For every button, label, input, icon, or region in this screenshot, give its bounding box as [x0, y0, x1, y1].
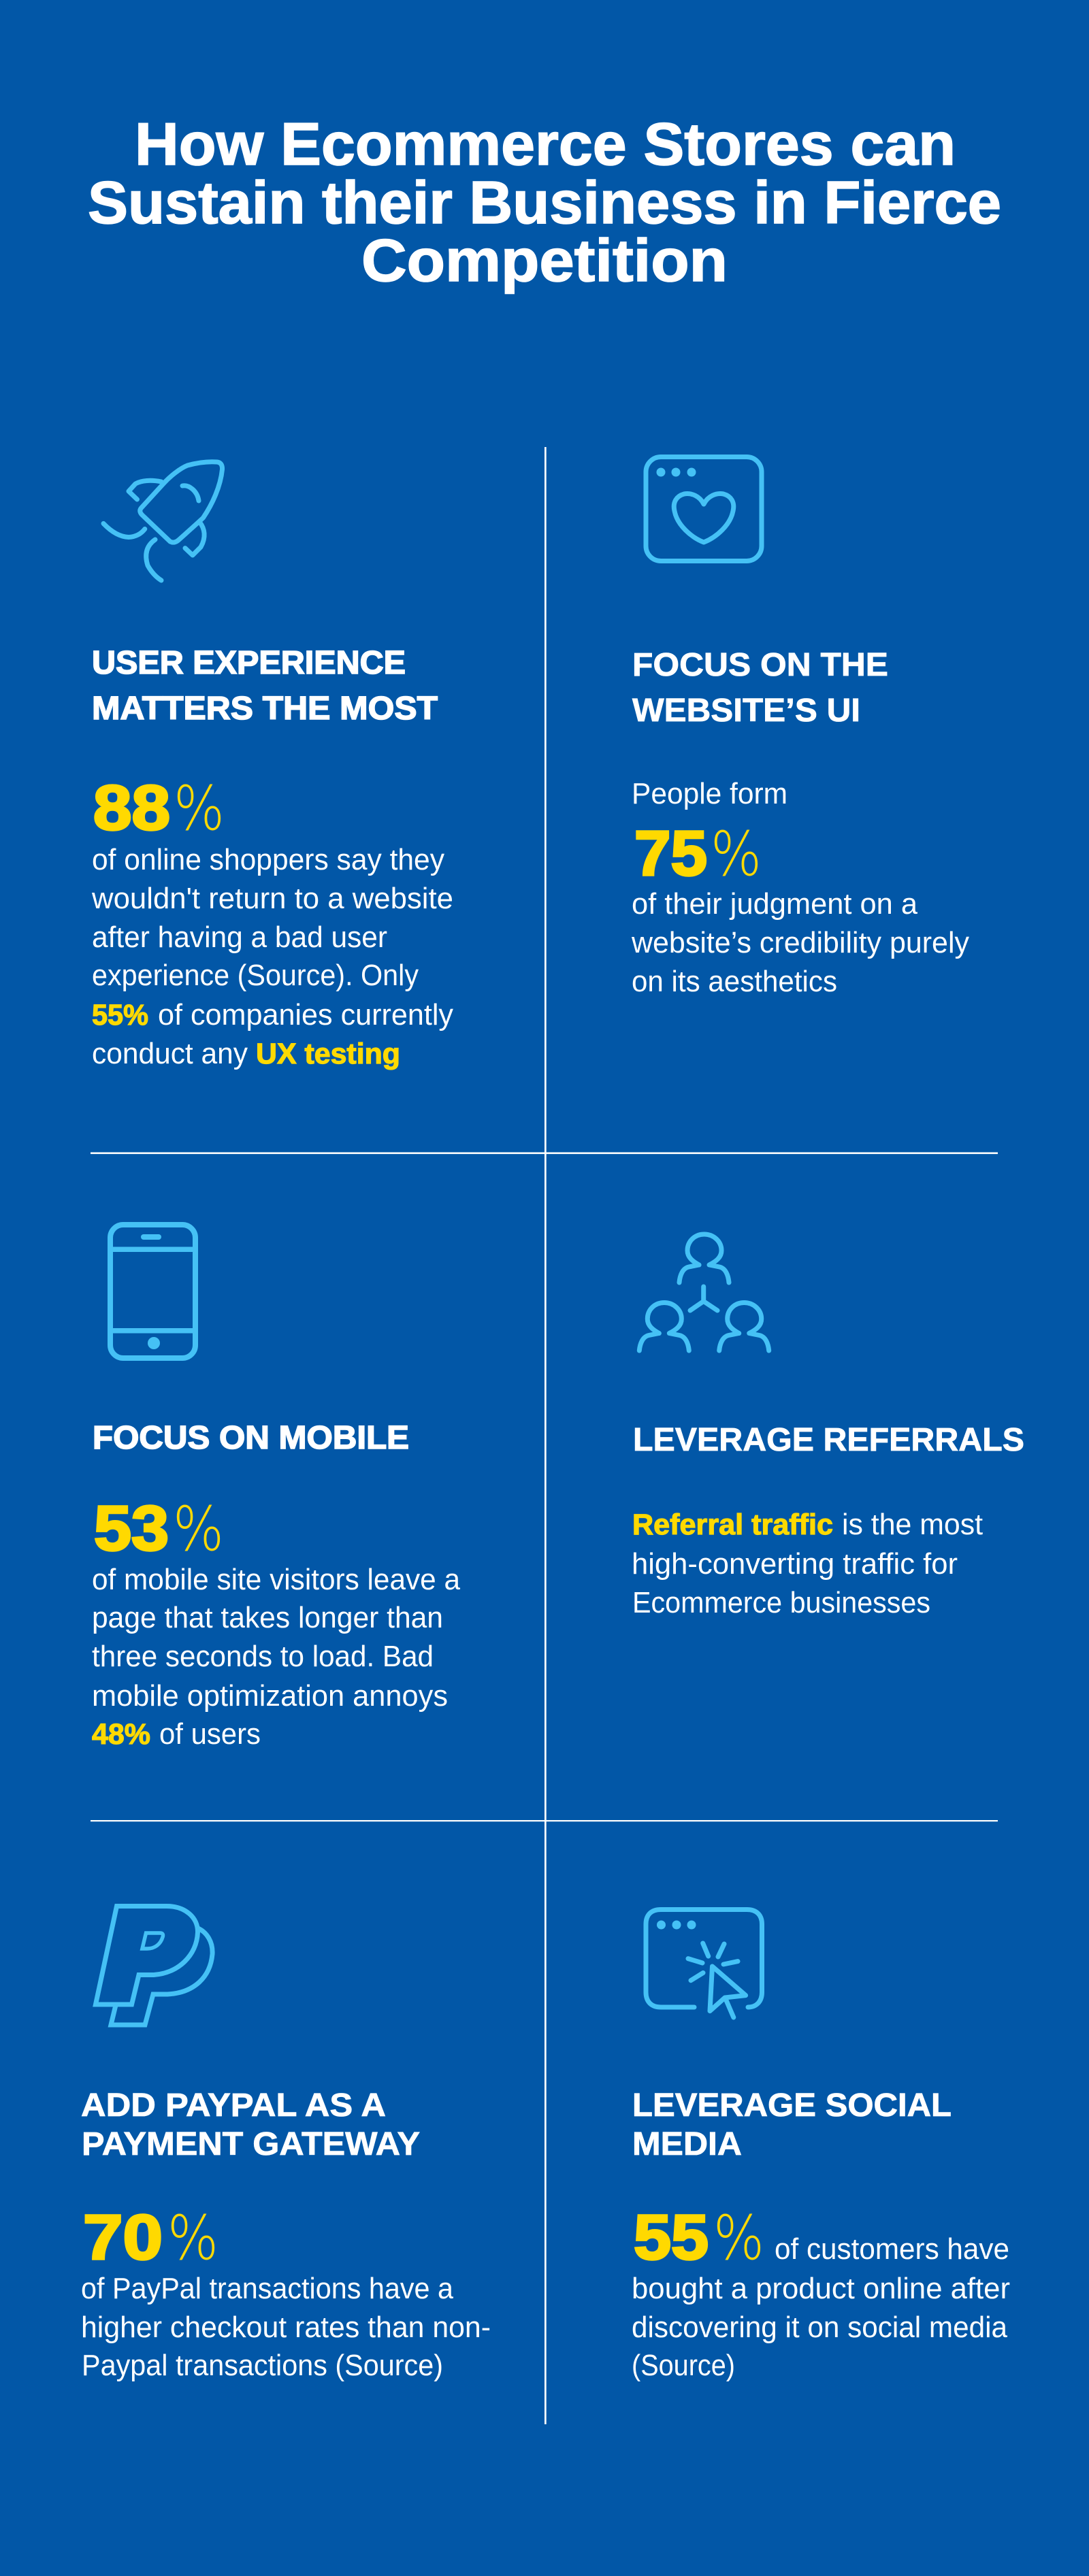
text block: user experience description: after having a bad user: [92, 921, 387, 954]
stat: 53%: 53: [94, 1493, 169, 1564]
icon: smartphone: [108, 1225, 197, 1358]
stat: 88%: %: [174, 773, 225, 844]
stat: 53%: %: [173, 1493, 224, 1565]
heading: leverage referrals: LEVERAGE REFERRALS: [633, 1422, 1024, 1458]
heading: user experience matters the most: MATTERS THE MOST: [92, 691, 438, 727]
title: Sustain their Business in Fierce: [88, 169, 1001, 236]
stat: 75%: %: [711, 819, 762, 890]
heading: add paypal as a payment gateway: [81, 2087, 420, 2162]
heading: leverage social media: MEDIA: [632, 2126, 742, 2162]
icon: referral people network: [639, 1234, 769, 1351]
text block: user experience description: [91, 843, 453, 1070]
heading: focus on mobile: FOCUS ON MOBILE: [93, 1420, 409, 1456]
panel: user experience: [91, 462, 453, 1070]
text block: referrals description: [632, 1508, 983, 1619]
icon: rocket: [103, 462, 223, 580]
stat: 88%: 88: [93, 772, 170, 843]
text block: mobile description: page that takes longer than: [92, 1601, 443, 1634]
text block: referrals description: Referral traffic: [632, 1508, 833, 1541]
text block: user experience description: experience (Source). Only: [92, 959, 419, 992]
icon: paypal logo: [95, 1906, 212, 2025]
text block: referrals description: is the most: [842, 1508, 983, 1541]
text block: mobile description: of mobile site visitors leave a: [92, 1563, 461, 1596]
text block: user experience description: wouldn't return to a website: [91, 882, 453, 915]
icon: browser window with heart: [646, 457, 762, 561]
text block: user experience description: of online shoppers say they: [92, 843, 444, 876]
text block: mobile description: three seconds to load. Bad: [92, 1640, 434, 1673]
text block: paypal description: Paypal transactions (Source): [82, 2349, 443, 2382]
heading: focus on the website's UI: FOCUS ON THE: [632, 647, 888, 683]
heading: focus on the website's UI: [632, 647, 888, 729]
stat: 70%: 70: [83, 2202, 163, 2273]
text block: social media description: (Source): [632, 2349, 735, 2382]
stat: 88%: [93, 772, 225, 844]
text block: paypal description: [81, 2272, 491, 2382]
heading: user experience matters the most: [92, 645, 438, 727]
title: Competition: [361, 227, 728, 294]
text block: referrals description: high-converting traffic for: [632, 1547, 958, 1581]
heading: focus on the website's UI: WEBSITE’S UI: [632, 693, 860, 729]
text block: paypal description: of PayPal transactions have a: [81, 2272, 453, 2305]
text block: user experience description: of companies currently: [158, 998, 453, 1031]
text block: social media description: of customers have: [775, 2232, 1009, 2266]
heading: user experience matters the most: USER EXPERIENCE: [92, 645, 406, 681]
stat: 70%: [83, 2202, 218, 2274]
stat: 55%: [634, 2202, 764, 2274]
text block: website UI description: [631, 887, 969, 998]
text block: user experience description: conduct any: [92, 1037, 248, 1070]
heading: leverage social media: LEVERAGE SOCIAL: [632, 2087, 952, 2124]
stat: 75%: 75: [634, 818, 707, 889]
panel: mobile: [92, 1225, 461, 1751]
text block: mobile description: 48%: [92, 1718, 150, 1751]
icon: browser window with cursor click: [646, 1909, 762, 2017]
panel: referrals: [632, 1234, 1024, 1619]
heading: add paypal as a payment gateway: PAYMENT GATEWAY: [82, 2126, 420, 2162]
text block: website UI description: on its aesthetics: [632, 965, 837, 998]
text block: mobile description: mobile optimization annoys: [92, 1679, 448, 1713]
heading: leverage social media: [632, 2087, 952, 2162]
title: How Ecommerce Stores can: [135, 110, 956, 178]
stat: 53%: [94, 1493, 224, 1565]
text block: user experience description: 55%: [92, 999, 148, 1031]
title: [88, 110, 1001, 294]
stat: 55%: %: [713, 2202, 764, 2274]
text block: website UI description: website’s credibility purely: [631, 926, 969, 959]
heading: add paypal as a payment gateway: ADD PAYPAL AS A: [81, 2087, 386, 2124]
text block: social media description: bought a product online after: [632, 2272, 1010, 2305]
text block: website UI description: of their judgment on a: [632, 887, 918, 921]
stat: 75%: [634, 818, 762, 890]
text block: paypal description: higher checkout rates than non-: [81, 2311, 491, 2344]
text block: social media description: discovering it on social media: [632, 2311, 1008, 2344]
text block: social media description: [632, 2232, 1010, 2382]
text block: referrals description: Ecommerce businesses: [632, 1586, 930, 1619]
text: people form: People form: [632, 777, 787, 810]
text block: user experience description: UX testing: [256, 1038, 400, 1070]
stat: 70%: %: [167, 2202, 218, 2274]
panel: paypal: [81, 1906, 491, 2382]
text block: mobile description: of users: [159, 1717, 261, 1751]
stat: 55%: 55: [634, 2202, 709, 2273]
text block: mobile description: [92, 1563, 461, 1751]
panel: website UI: [631, 457, 969, 998]
panel: social media: [632, 1909, 1010, 2382]
